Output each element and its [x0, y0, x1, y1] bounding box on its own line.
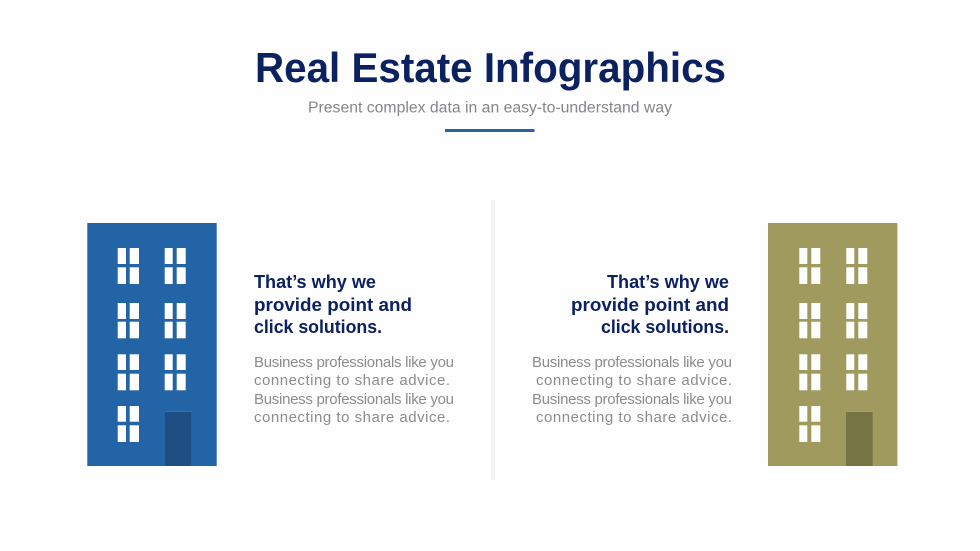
right body text: connecting to share advice.: [536, 409, 732, 426]
left heading: provide point and: [254, 294, 412, 315]
subtitle: Present complex data in an easy-to-understand way: [308, 100, 672, 116]
right body text: Business professionals like you: [532, 354, 732, 371]
title: Real Estate Infographics: [255, 44, 726, 91]
left heading: [254, 271, 412, 337]
left heading: click solutions.: [254, 316, 382, 337]
left body text: [254, 354, 454, 426]
right heading: That’s why we: [607, 271, 729, 292]
right heading: provide point and: [571, 294, 729, 315]
right body text: Business professionals like you: [532, 391, 732, 408]
left body text: connecting to share advice.: [254, 372, 450, 389]
left heading: That’s why we: [254, 271, 376, 292]
right body text: [532, 354, 732, 426]
right heading: [571, 271, 729, 337]
blue building door: [165, 411, 192, 466]
olive building windows: [799, 248, 867, 442]
left body text: connecting to share advice.: [254, 409, 450, 426]
blue building windows: [118, 248, 186, 442]
left body text: Business professionals like you: [254, 391, 454, 408]
center divider: [491, 200, 495, 480]
icon: olive building: [768, 223, 897, 466]
title underline: [445, 129, 534, 132]
left body text: Business professionals like you: [254, 354, 454, 371]
olive building door: [846, 411, 873, 466]
right heading: click solutions.: [601, 316, 729, 337]
icon: blue building: [87, 223, 217, 466]
right body text: connecting to share advice.: [536, 372, 732, 389]
